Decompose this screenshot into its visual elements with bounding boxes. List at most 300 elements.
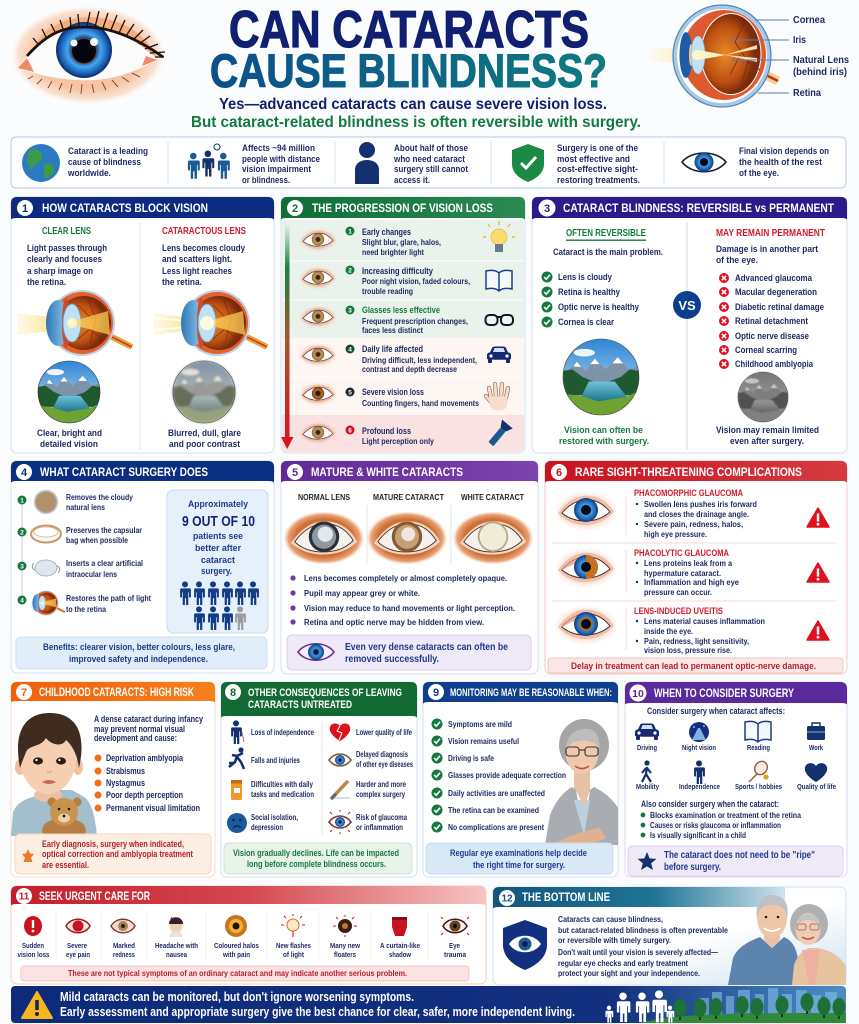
sign: new flashes of light: of light [283,950,304,959]
panel 12: the bottom line [493,887,846,985]
text: 94 million: Affects ~94 million [242,143,315,153]
stage 3: 3 [348,308,352,314]
panel 9: monitoring may be reasonable [423,682,618,877]
column: clear lens: Clear, bright and [37,428,102,439]
bullet list: Strabismus [106,766,145,776]
title [210,1,607,97]
sign: new flashes of light: New flashes [276,941,311,950]
bullet list: Poor depth perception [106,790,183,800]
sign: eye trauma: Eye [449,941,460,950]
text: cost-effective: cost-effective sight- [557,164,638,174]
callout: dense cataracts removable [287,635,531,670]
loss of independence [231,720,314,744]
risk of glaucoma [329,810,408,834]
eye: mature cataract: MATURE CATARACT [373,493,444,502]
column: clear lens: detailed vision [40,439,98,450]
loss of independence: Loss of independence [251,728,314,737]
factor: independence: Independence [679,782,720,791]
callout: not typical symptoms: These are not typical symptoms of an ordinary cataract and may indicate another serious problem. [68,968,407,978]
checklist: No complications are present [448,822,544,832]
icon: shield check [512,144,544,182]
text: half need surgery [393,143,468,185]
column: clear lens: a sharp image on [27,266,93,277]
column: clear lens: the retina. [27,277,66,288]
text: 94 million: vision impairment [242,164,311,174]
column: clear lens [17,225,132,450]
step 2 [18,526,142,545]
panel: key facts strip [11,137,846,188]
text: 94 million [242,143,320,185]
panel 10: when to consider surgery [625,682,847,877]
phacomorphic glaucoma: high eye pressure. [644,530,707,539]
panel 6: rare sight-threatening complications [545,461,847,674]
sign: eye trauma: trauma [444,950,467,959]
text: final message: Mild cataracts can be monitored, but don't ignore worsening symptoms. [60,990,414,1004]
callout: delay warning [548,658,843,673]
risk of glaucoma: or inflammation [356,823,403,832]
stage 2: Poor night vision, faded colours, [362,277,470,286]
icon: globe [22,144,60,182]
bullet list: Deprivation amblyopia [106,753,184,763]
heading [11,197,274,220]
lens-induced uveitis: Pain, redness, light sensitivity, [644,637,749,646]
column: cataractous lens: CATARACTOUS LENS [162,225,246,237]
phacolytic glaucoma [554,548,829,597]
stage 3: faces less distinct [362,326,423,335]
heading: 11 [19,892,30,902]
text: final message [60,990,575,1019]
factor: reading: Reading [747,743,770,752]
factor: independence [679,760,720,791]
sign: headache with nausea: Headache with [155,941,198,950]
callout: not typical symptoms [21,966,469,981]
sign: many new floaters: Many new [330,941,360,950]
column: may remain permanent: Childhood amblyopia [735,359,814,369]
sign: marked redness [111,919,135,959]
heading [423,682,618,704]
eye anatomy diagram: Retina [793,88,821,99]
column: may remain permanent [716,228,825,447]
panel 1: how cataracts block vision [11,197,274,453]
heading: SEEK URGENT CARE FOR [39,891,151,903]
lens-induced uveitis: inside the eye. [644,627,693,636]
also consider list: Causes or risks glaucoma or inflammation [650,820,781,830]
callout: dense cataracts removable: removed successfully. [345,654,439,665]
text: cost-effective: restoring treatments. [557,175,640,185]
column: cataractous lens: Lens becomes cloudy [162,243,246,254]
panel 3: reversible vs permanent [532,197,847,453]
checklist: Glasses provide adequate correction [448,770,566,780]
eye: normal lens [283,493,365,565]
column: may remain permanent: Corneal scarring [735,345,797,355]
panel 5: mature and white cataracts [281,461,538,674]
step 3: Inserts a clear artificial [66,559,143,568]
stage 5: Counting fingers, hand movements [362,399,479,408]
stat box: 9 out of 10: better after [195,543,241,554]
factor: night vision [682,722,716,752]
difficulties with daily tasks: Difficulties with daily [251,780,314,789]
illustration: older woman with glasses [545,719,618,845]
heading [281,197,525,220]
heading: THE BOTTOM LINE [522,890,610,904]
factor: reading [745,721,771,752]
column: clear lens: CLEAR LENS [42,225,91,237]
eye: white cataract [452,493,534,565]
badge: VS: VS [678,298,696,313]
subtitle: But cataract-related blindness is often reversible with surgery. [191,114,641,131]
icon: eye shield [503,920,547,970]
eye anatomy diagram: (behind iris) [793,67,847,78]
stage 5 [298,382,508,410]
checklist: Daily activities are unaffected [448,788,545,798]
eye: normal lens: NORMAL LENS [298,493,351,502]
step 2: 2 [20,530,24,536]
stat box: 9 out of 10: cataract [201,555,236,566]
callout: cataract need not be ripe: The cataract does not need to be "ripe" [664,850,815,861]
bullet list [290,573,515,627]
text: bottom line message: Cataracts can cause blindness, [558,914,663,924]
heading: CATARACTS UNTREATED [248,699,352,711]
heading [545,461,847,483]
lens-induced uveitis: Lens material causes inflammation [644,617,765,626]
column: may remain permanent: Vision may remain limited [716,425,819,436]
column: clear lens: Light passes through [27,243,107,254]
heading [221,682,417,718]
callout: early diagnosis: Early diagnosis, surgery when indicated, [42,839,184,849]
text: final vision [739,146,829,178]
callout: dense cataracts removable: Even very dense cataracts can often be [345,642,508,653]
social isolation [227,813,298,833]
column: cataractous lens: Blurred, dull, glare [168,428,241,439]
text: half need surgery: About half of those [394,143,468,153]
column: often reversible [542,228,663,447]
eye anatomy diagram [650,5,849,107]
lens-induced uveitis: LENS-INDUCED UVEITIS [634,606,723,616]
text: half need surgery: surgery still cannot [394,164,468,174]
sign: many new floaters [330,915,360,959]
sign: new flashes of light [276,914,311,959]
illustration: toddler with teddy bear [11,713,97,842]
icon: person [355,142,379,184]
sign: sudden vision loss: Sudden [22,941,44,950]
sign: severe eye pain: Severe [67,941,87,950]
factor: night vision: Night vision [682,743,716,752]
heading: 8 [230,687,236,699]
illustration: family silhouette [605,990,674,1023]
factor: sports and hobbies: Sports / hobbies [735,782,782,791]
factor: quality of life: Quality of life [797,782,836,791]
text: final vision: the health of the rest [739,157,822,167]
delayed diagnosis: Delayed diagnosis [356,750,408,759]
harder surgery: complex surgery [356,790,406,799]
callout: gradual decline: long before complete blindness occurs. [247,859,386,869]
stage 6: Profound loss [362,426,411,436]
column: clear lens: clearly and focuses [27,254,102,265]
factor: quality of life [797,763,836,791]
eye anatomy diagram: Iris [793,35,806,46]
lens-induced uveitis [554,605,829,655]
sign: curtain-like shadow: shadow [389,950,411,959]
lower quality of life [330,723,413,741]
column: may remain permanent: Retinal detachment [735,316,808,326]
stage 1: Early changes [362,227,411,237]
heading: 4 [21,467,28,479]
panel 4: what cataract surgery does [11,461,274,673]
column: cataractous lens: the retina. [162,277,202,288]
difficulties with daily tasks: tasks and medication [251,790,314,799]
text: leading cause: cause of blindness [68,157,141,167]
step 3 [18,559,143,579]
sign: coloured halos: with pain [222,950,250,959]
factor: mobility: Mobility [636,782,660,791]
factor: work [807,723,825,752]
column: may remain permanent: even after surgery. [730,436,804,447]
step 2: bag when possible [66,536,128,545]
heading: OTHER CONSEQUENCES OF LEAVING [248,687,402,699]
heading [493,887,785,909]
sign: eye trauma [441,917,469,959]
column: often reversible: OFTEN REVERSIBLE [566,228,646,239]
eye: white cataract: WHITE CATARACT [461,493,524,502]
stage 5: 5 [348,390,352,396]
stat box: 9 out of 10: patients see [193,531,243,542]
column: often reversible: Cornea is clear [558,317,614,327]
column: cataractous lens: and scatters light. [162,254,232,265]
text: childhood risk intro: development and cause: [94,733,177,743]
phacolytic glaucoma: pressure can occur. [644,588,712,597]
text: bottom line message: or reversible with timely surgery. [558,935,671,945]
bullet list: Retina and optic nerve may be hidden from view. [304,617,484,627]
text: cost-effective: Surgery is one of the [557,143,638,153]
phacomorphic glaucoma: Swollen lens pushes iris forward [644,500,757,509]
bullet list: Permanent visual limitation [106,803,200,813]
text: final message: Early assessment and appropriate surgery give the best chance for clear, safer, more independent living. [60,1005,575,1019]
harder surgery: Harder and more [356,780,407,789]
text: cost-effective [557,143,640,185]
text: leading cause: Cataract is a leading [68,146,148,156]
text: final vision: Final vision depends on [739,146,829,156]
icon: group of people [188,144,230,179]
bullet list [94,753,200,813]
column: often reversible: Vision can often be [564,425,643,436]
callout: benefits: improved safety and independence. [69,654,208,665]
footer banner [11,986,846,1023]
icon: eye [682,152,726,172]
illustration: large blue eye [11,6,165,104]
callout: early diagnosis: are essential. [42,860,89,870]
heading: 3 [544,203,550,215]
risk of glaucoma: Risk of glaucoma [356,813,408,822]
column: often reversible: Optic nerve is healthy [558,302,640,312]
column: may remain permanent: Diabetic retinal damage [735,302,824,312]
delayed diagnosis: of other eye diseases [356,760,413,769]
phacomorphic glaucoma: PHACOMORPHIC GLAUCOMA [634,488,743,498]
text: childhood risk intro: may prevent normal visual [94,724,185,734]
lens-induced uveitis: vision loss, pressure rise. [644,646,732,655]
heading [281,461,538,483]
stage 6 [298,420,513,448]
heading: MATURE & WHITE CATARACTS [311,465,463,479]
phacolytic glaucoma: PHACOLYTIC GLAUCOMA [634,548,729,558]
heading: WHEN TO CONSIDER SURGERY [654,686,794,700]
sign: severe eye pain: eye pain [66,950,90,959]
text: final vision: of the eye. [739,168,779,178]
step 4: 4 [20,598,24,604]
badge: VS [673,291,701,319]
column: cataractous lens [153,225,267,450]
callout: benefits: Benefits: clearer vision, better colours, less glare, [43,642,235,653]
phacolytic glaucoma: hypermature cataract. [644,569,721,578]
also consider list: Is visually significant in a child [650,830,746,840]
step 4: to the retina [66,605,106,614]
sign: curtain-like shadow: A curtain-like [380,941,420,950]
panel 2: progression of vision loss [281,197,525,453]
stage 4 [298,343,511,374]
callout: cataract need not be ripe: before surgery. [664,862,721,873]
column: may remain permanent: Macular degeneration [735,287,817,297]
stage 3: Frequent prescription changes, [362,317,468,326]
heading: 6 [556,467,562,479]
column: often reversible: restored with surgery. [559,436,649,447]
heading: 9 [433,687,439,699]
bullet list: Nystagmus [106,778,145,788]
stage 2: trouble reading [362,287,413,296]
heading: THE PROGRESSION OF VISION LOSS [312,201,493,215]
harder surgery [331,780,407,799]
social isolation: depression [251,823,283,832]
stage 2 [298,266,512,296]
checklist [432,718,566,832]
factor: driving: Driving [637,743,657,752]
heading [625,682,847,705]
callout: early diagnosis: optical correction and amblyopia treatment [42,849,193,859]
step 3: 3 [20,564,24,570]
stat box: 9 out of 10: Approximately [188,499,249,510]
sign: many new floaters: floaters [334,950,356,959]
eye anatomy diagram: Cornea [793,15,825,26]
callout: regular examinations: Regular eye examinations help decide [450,848,587,858]
heading [11,886,486,906]
text: 94 million: or blindness. [242,175,290,185]
step 1: natural lens [66,503,105,512]
heading: 2 [292,203,298,215]
sign: headache with nausea [155,917,198,959]
stat box: 9 out of 10: 9 OUT OF 10 [182,513,255,530]
heading [11,461,274,483]
phacolytic glaucoma: Lens proteins leak from a [644,559,732,568]
callout: cataract need not be ripe [628,846,843,876]
stage 2: Increasing difficulty [362,266,433,276]
sign: marked redness: Marked [113,941,135,950]
step 3: intraocular lens [66,570,117,579]
falls and injuries [229,747,301,769]
step 2: Preserves the capsular [66,526,142,535]
checklist: Driving is safe [448,753,494,763]
subtitle: Yes—advanced cataracts can cause severe vision loss. [219,96,607,113]
callout: delay warning: Delay in treatment can lead to permanent optic-nerve damage. [571,661,816,672]
stage 4: Daily life affected [362,344,423,354]
column: may remain permanent: Advanced glaucoma [735,273,813,283]
text: bottom line message [558,914,728,978]
stage 2: 2 [348,268,352,274]
checklist: Vision remains useful [448,736,519,746]
step 1: 1 [20,498,24,504]
sign: curtain-like shadow [380,917,420,959]
heading [11,682,215,703]
stat box: 9 out of 10 [167,490,268,633]
sign: sudden vision loss: vision loss [18,950,50,959]
stage 3 [298,305,513,335]
text: childhood risk intro: A dense cataract during infancy [94,714,203,724]
sign: headache with nausea: nausea [166,950,188,959]
factor: work: Work [809,743,824,752]
stage 6: 6 [348,428,352,434]
text: bottom line message: Don't wait until your vision is severely affected— [558,947,718,957]
stage 1 [298,221,515,257]
factor: mobility [636,760,660,791]
factor: driving [635,724,659,752]
text: bottom line message: regular eye checks and early treatment [558,958,688,968]
falls and injuries: Falls and injuries [251,756,301,765]
illustration: older couple [728,895,846,985]
column: cataractous lens: and poor contrast [169,439,241,450]
column: often reversible: Retina is healthy [558,287,621,297]
callout: gradual decline [224,843,412,874]
sign: severe eye pain [66,919,90,959]
callout: regular examinations: the right time for surgery. [473,860,565,870]
column: often reversible: Cataract is the main problem. [553,247,663,257]
text: leading cause [67,146,148,178]
text: childhood risk intro [94,714,203,743]
stage 3: Glasses less effective [362,305,440,315]
sign: marked redness: redness [113,950,135,959]
title: CAN CATARACTS [229,1,589,59]
phacomorphic glaucoma: Severe pain, redness, halos, [644,520,743,529]
heading [532,197,847,220]
arrow: worsening [281,225,294,449]
stat box: 9 out of 10: surgery. [201,566,232,577]
heading: 1 [22,203,28,215]
heading: MONITORING MAY BE REASONABLE WHEN: [450,687,612,699]
panel 10: when to consider surgery: Consider surgery when cataract affects: [647,706,785,716]
social isolation: Social isolation, [251,813,298,822]
heading: 5 [292,467,298,479]
stage 4: contrast and depth decrease [362,365,457,374]
heading: WHAT CATARACT SURGERY DOES [40,465,208,479]
step 1: Removes the cloudy [66,493,133,502]
phacomorphic glaucoma [554,488,829,539]
eye: mature cataract [366,493,448,565]
heading: 7 [21,687,27,699]
text: cost-effective: most effective and [557,154,630,164]
column: may remain permanent: MAY REMAIN PERMANENT [716,228,825,239]
step 1 [18,490,133,514]
text: half need surgery: who need cataract [393,154,465,164]
bullet list: Pupil may appear grey or white. [304,588,420,598]
panel 7: childhood cataracts [11,682,215,877]
checklist: The retina can be examined [448,805,539,815]
phacolytic glaucoma: Inflammation and high eye [644,578,740,587]
text: leading cause: worldwide. [67,168,111,178]
heading: CHILDHOOD CATARACTS: HIGH RISK [39,687,195,699]
checklist: Symptoms are mild [448,719,512,729]
also consider list: Blocks examination or treatment of the retina [650,810,801,820]
panel 8: consequences of leaving cataracts untreated [221,682,417,877]
step 4: Restores the path of light [66,594,151,603]
also consider list: Also consider surgery when the cataract: [641,799,779,809]
heading: 12 [501,894,513,904]
column: may remain permanent: Optic nerve disease [735,331,809,341]
